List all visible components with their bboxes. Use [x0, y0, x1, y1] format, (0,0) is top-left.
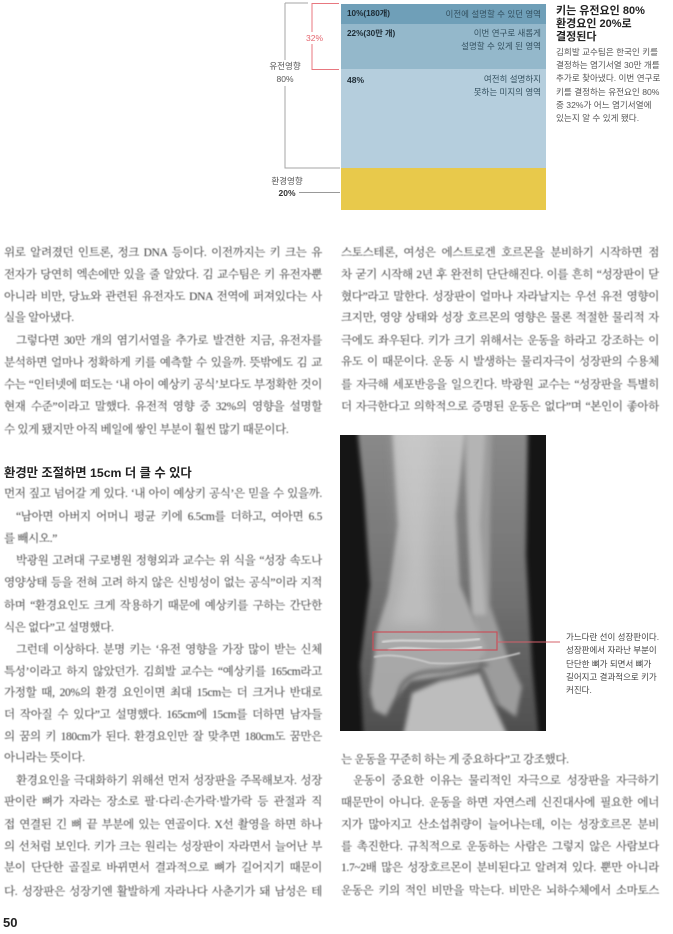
text block: left column lower: 의 꿈의 키 180cm가 된다. 환경요인만 잘 맞추면 180cm도 꿈만은	[4, 731, 322, 743]
text block: left column upper	[4, 245, 322, 436]
text block: left column lower: 더 작아질 수 있다”고 설명했다. 165cm에 15cm를 더하면 남자들	[4, 709, 322, 721]
side note: body text: 결정하는 염기서열 30만 개를	[556, 60, 660, 70]
text block: right column upper: 차 굳기 시작해 2년 후 완전히 단단해진다. 이를 흔히 “성장판이 닫	[341, 269, 659, 281]
segment: 22 percent: 22%(30만 개)	[347, 29, 395, 38]
text block: right column lower: 를 촉진한다. 규칙적으로 운동하는 사람은 그렇지 않은 사람보다	[341, 841, 659, 853]
callout caption	[566, 632, 659, 695]
side note: heading	[556, 4, 645, 43]
segment: 48 percent	[341, 69, 546, 168]
text block: left column lower: 특성’이라고 하지 않았던가. 김희발 교수는 “예상키를 165cm라고	[4, 666, 322, 678]
text block: right column lower	[341, 752, 660, 897]
text block: left column upper: 분석하면 얼마나 정확하게 키를 예측할 수 있을까. 뜻밖에도 김 교	[4, 357, 322, 369]
text block: right column lower: 는 운동을 꾸준히 하는 게 중요하다”고 강조했다.	[341, 754, 569, 766]
callout caption: 길어지고 결과적으로 키가	[566, 672, 657, 682]
fibula highlight	[466, 425, 486, 615]
text block: left column lower: “남아면 아버지 어머니 평균 키에 6.5cm를 더하고, 여아면 6.5	[16, 511, 322, 523]
segment: 48 percent: 여전히 설명하지	[484, 74, 541, 84]
text block: left column lower: 의 선처럼 보인다. 키가 크는 원리는 성장판이 자라면서 늘어난 부	[4, 841, 322, 853]
text block: right column lower: 운동이 중요한 이유는 물리적인 자극으로 성장판을 자극하기	[353, 775, 659, 787]
text block: right column upper: 를 자극해 세포반응을 일으킨다. 박광원 교수는 “성장판을 특별히	[341, 379, 659, 391]
text block: left column upper: 위로 알려졌던 인트론, 정크 DNA 등이다. 이전까지는 키 크는 유	[4, 247, 322, 259]
text block: right column lower: 운동은 키의 적인 비만을 막는다. 비만은 뇌하수체에서 소마토스	[341, 885, 659, 897]
callout caption: 성장판에서 자라난 부분이	[566, 645, 657, 655]
text block: right column upper: 더 자극한다고 의학적으로 증명된 운동은 없다”며 “본인이 좋아하	[341, 401, 659, 413]
text block: right column upper	[340, 245, 660, 413]
text block: left column lower: 가정할 때, 20%의 환경 요인이면 최대 15cm는 더 크거나 반대로	[4, 687, 322, 699]
text block: left column upper: 수는 “인터넷에 떠도는 ‘내 아이 예상키 공식’보다도 부정확한 것이	[4, 379, 322, 391]
segment: 10 percent: 이전에 설명할 수 있던 영역	[446, 9, 541, 19]
side note: body text: 키를 결정하는 유전요인 80%	[556, 87, 659, 97]
segment: 22 percent	[341, 24, 546, 69]
side note: heading: 결정된다	[556, 31, 596, 43]
segment: 48 percent: 못하는 미지의 영역	[474, 87, 541, 97]
text block: left column lower: 박광원 고려대 구로병원 정형외과 교수는 위 식을 “성장 속도나	[16, 555, 322, 567]
x-ray photo of ankle with growth plate	[340, 435, 546, 731]
label: genetic influence 80 percent: 유전영향	[269, 61, 301, 71]
text block: left column lower: 분이 단단한 골질로 바뀌면서 결과적으로 뼈가 길어지기 때문이	[4, 862, 322, 874]
text block: left column lower: 아니라는 뜻이다.	[4, 752, 85, 764]
soft tissue	[355, 435, 540, 731]
callout caption: 가느다란 선이 성장판이다.	[566, 632, 659, 642]
label: environmental influence 20 percent: 환경영향	[271, 176, 303, 186]
segment: 22 percent: 설명할 수 있게 된 영역	[461, 41, 541, 51]
text block: left column lower: 접 연결된 긴 뼈 끝 부분에 있는 연골이다. X선 촬영을 하면 하나	[4, 819, 322, 831]
text block: left column lower: 환경요인을 극대화하기 위해선 먼저 성장판을 주목해보자. 성장	[16, 775, 322, 787]
chart: genetic and environmental share of height	[269, 2, 546, 210]
page number: 50	[3, 915, 17, 930]
segment: environment 20 percent	[341, 168, 546, 210]
side note: body text: 중 32%가 어느 염기서열에	[556, 100, 652, 110]
text block: right column upper: 극에도 좌우된다. 키가 크기 위해서는 운동을 하라고 강조하는 이	[341, 335, 659, 347]
text block: right column upper: 유도 이 때문이다. 운동 시 발생하는 물리자극이 성장판의 수용체	[341, 356, 659, 368]
side note: body text: 추가로 찾아냈다. 이번 연구로	[556, 73, 660, 83]
segment: 48 percent: 48%	[347, 75, 364, 85]
tibia highlight	[392, 442, 432, 626]
tibia	[370, 425, 486, 716]
text block: right column upper: 크지만, 영양 상태와 성장 호르몬의 영향은 물론 적절한 물리적 자	[341, 312, 659, 324]
text block: left column lower: 를 빼시오.”	[4, 533, 57, 545]
label: genetic influence 80 percent: 80%	[276, 74, 294, 84]
label: environmental influence 20 percent: 20%	[278, 188, 296, 198]
text block: left column upper: 전자가 당연히 엑손에만 있을 줄 알았다. 김 교수팀은 키 유전자뿐	[4, 269, 322, 281]
text block: left column lower	[4, 486, 323, 898]
text block: left column lower: 다. 성장판은 성장기엔 활발하게 자라나다 사춘기가 돼 남성은 테	[4, 886, 322, 898]
callout caption: 커진다.	[566, 685, 592, 695]
segment: 22 percent: 이번 연구로 새롭게	[474, 28, 541, 38]
text block: left column upper: 아니라 비만, 당뇨와 관련된 유전자도 DNA 전역에 퍼져있다는 사	[4, 291, 322, 303]
callout: red box and leader line over growth plate	[372, 631, 560, 651]
callout caption: 단단한 뼈가 되면서 뼈가	[566, 659, 651, 669]
label: 32 percent: 32%	[306, 33, 323, 43]
label: environmental influence 20 percent	[271, 176, 303, 198]
label: genetic influence 80 percent	[268, 60, 302, 86]
text block: left column upper: 현재 수준”이라고 말했다. 유전적 영향 중 32%의 영향을 설명할	[4, 401, 322, 413]
section heading: 환경만 조절하면 15cm 더 클 수 있다	[4, 466, 192, 480]
bracket lines: genetic 80 percent and red 32 percent	[284, 2, 340, 193]
side note: body text: 있는지 알 수 있게 됐다.	[556, 113, 639, 123]
segment: 10 percent	[341, 4, 546, 24]
text block: left column lower: 하며 “환경요인도 크게 작용하기 때문에 예상키를 구하는 간단한	[4, 600, 322, 612]
text block: left column upper: 그렇다면 30만 개의 염기서열을 추가로 발견한 지금, 유전자를	[16, 335, 322, 347]
text block: left column lower: 그런데 이상하다. 분명 키는 ‘유전 영향을 가장 많이 받는 신체	[16, 644, 322, 656]
fibula	[462, 425, 522, 717]
segment: 10 percent: 10%(180개)	[347, 9, 390, 18]
side note: heading: 키는 유전요인 80%	[556, 5, 645, 17]
text block: right column upper: 스토스테론, 여성은 에스트로겐 호르몬을 분비하기 시작하면 점	[341, 247, 659, 259]
text block: left column lower: 먼저 짚고 넘어갈 게 있다. ‘내 아이 예상키 공식’은 믿을 수 있을까.	[4, 488, 322, 500]
side note: heading: 환경요인 20%로	[556, 18, 632, 30]
text block: right column lower: 지가 많아지고 산소섭취량이 늘어나는데, 이는 성장호르몬 분비	[341, 819, 659, 831]
joint line	[374, 653, 520, 664]
text block: left column upper: 실을 알아냈다.	[4, 312, 74, 324]
text block: right column upper: 혔다”라고 말한다. 성장판이 얼마나 자라날지는 우선 유전 영향이	[341, 291, 659, 303]
growth plate	[382, 639, 480, 642]
text block: left column upper: 수 있게 됐지만 아직 베일에 쌓인 부분이 훨씬 많기 때문이다.	[4, 424, 288, 436]
text block: left column lower: 판이란 뼈가 자라는 장소로 팔·다리·손가락·발가락 등 관절과 직	[4, 796, 322, 808]
side note: body text	[556, 47, 660, 123]
side note: body text: 김희발 교수팀은 한국인 키를	[556, 47, 658, 57]
text block: right column lower: 때문만이 아니다. 운동을 하면 자연스레 신진대사에 필요한 에너	[341, 797, 659, 809]
text block: right column lower: 1.7~2배 많은 성장호르몬이 분비된다고 알려져 있다. 뿐만 아니라	[341, 862, 659, 874]
text block: left column lower: 식은 없다”고 설명했다.	[4, 622, 114, 634]
text block: left column lower: 영양상태 등을 전혀 고려 하지 않은 신빙성이 없는 공식”이라 지적	[4, 577, 322, 589]
talus	[401, 671, 508, 731]
